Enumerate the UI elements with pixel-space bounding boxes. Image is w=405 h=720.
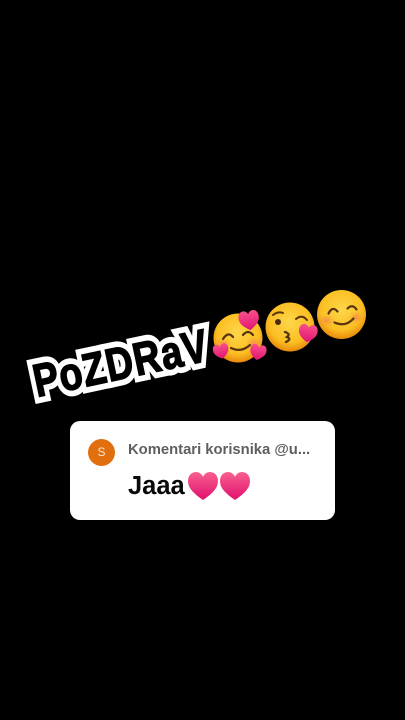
comment card bbox=[70, 421, 335, 520]
title: PoZDRaV: PoZDRaV bbox=[28, 319, 213, 407]
icon: two pink hearts bbox=[188, 472, 250, 500]
avatar: S bbox=[97, 445, 106, 459]
emoji: smiling face with hearts bbox=[212, 309, 268, 362]
emoji: face blowing a kiss bbox=[266, 302, 318, 352]
title: PoZDRaV: PoZDRaV bbox=[28, 319, 213, 407]
comment text: Jaaa bbox=[128, 472, 185, 500]
username line: Komentari korisnika @u... bbox=[128, 442, 310, 458]
emoji: smiling face with blush bbox=[317, 290, 366, 339]
avatar bbox=[88, 439, 115, 466]
